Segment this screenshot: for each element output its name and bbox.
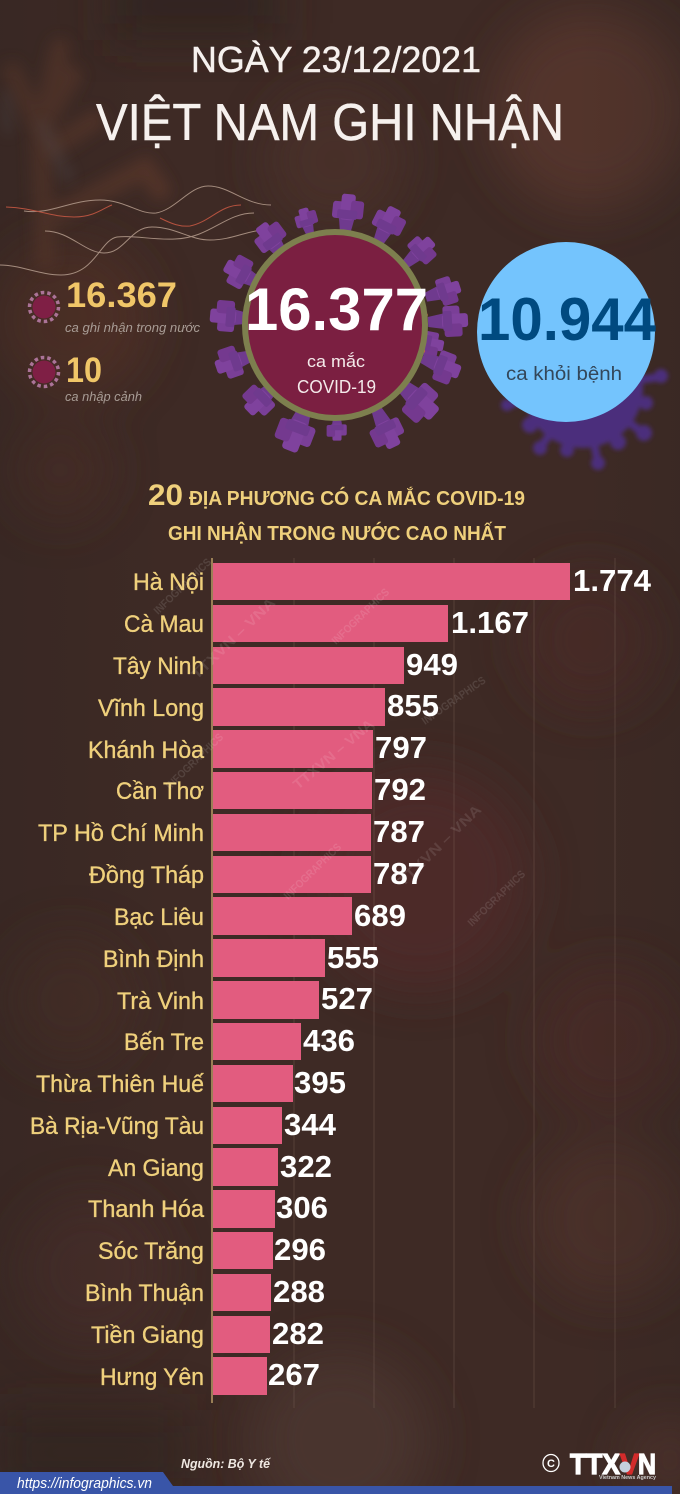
TTXVN logo: C (547, 1458, 555, 1470)
row: An Giang: 322 (280, 1149, 332, 1184)
row: Tiền Giang (91, 1316, 324, 1353)
row: Cần Thơ: 792 (374, 772, 426, 807)
row: Cà Mau (124, 605, 529, 642)
row: Trà Vinh: Trà Vinh (117, 988, 204, 1015)
watermarks: TTXVN – VNA (394, 801, 484, 889)
source: Nguồn: Bộ Y tế (181, 1456, 272, 1471)
row: Hà Nội: 1.774 (573, 563, 652, 598)
row: Bạc Liêu: Bạc Liêu (114, 904, 204, 931)
row: Bình Thuận: Bình Thuận (85, 1280, 204, 1307)
virus: recovered backdrop (501, 328, 668, 470)
row: Cần Thơ (116, 772, 426, 809)
row: Cần Thơ: Cần Thơ (116, 778, 204, 805)
recovered circle: 10.944 (478, 286, 657, 353)
watermarks: INFOGRAPHICS (164, 731, 226, 792)
row: Bến Tre (124, 1023, 355, 1060)
watermarks: TTXVN – VNA (188, 594, 278, 682)
virus: total cases (209, 193, 469, 457)
row: Hà Nội: Hà Nội (133, 569, 204, 596)
row: Khánh Hòa (88, 730, 427, 768)
title: VIỆT NAM GHI NHẬN (96, 94, 564, 152)
chart heading (148, 479, 525, 545)
virus: total cases: 16.377 (245, 276, 428, 343)
TTXVN logo: V (620, 1449, 640, 1481)
row: Vĩnh Long: 855 (387, 688, 439, 723)
row: Vĩnh Long: Vĩnh Long (98, 695, 204, 722)
row: Hà Nội (133, 563, 652, 600)
chart heading: GHI NHẬN TRONG NƯỚC CAO NHẤT (168, 521, 506, 545)
row: Khánh Hòa: Khánh Hòa (88, 737, 205, 764)
row: Hưng Yên: 267 (268, 1357, 320, 1392)
TTXVN logo: Vietnam News Agency (599, 1475, 656, 1481)
row: Tây Ninh (113, 647, 458, 684)
row: Tây Ninh: Tây Ninh (113, 653, 204, 680)
stat: imported cases: ca nhập cảnh (65, 389, 142, 404)
row: Bình Thuận (85, 1274, 325, 1311)
row: TP Hồ Chí Minh (38, 814, 425, 851)
row: Hưng Yên: Hưng Yên (100, 1364, 204, 1391)
stat: imported cases (30, 351, 142, 404)
title (96, 39, 564, 152)
row: Thừa Thiên Huế: Thừa Thiên Huế (36, 1071, 205, 1098)
row: Bạc Liêu: 689 (354, 898, 406, 933)
watermarks (152, 556, 528, 929)
row: Trà Vinh: 527 (321, 981, 373, 1016)
stat: domestic cases: ca ghi nhận trong nước (65, 320, 201, 335)
row: Thanh Hóa (88, 1190, 328, 1228)
watermarks: INFOGRAPHICS (152, 556, 214, 617)
watermarks: TTXVN – VNA (290, 716, 377, 792)
row: Bình Thuận: 288 (273, 1274, 325, 1309)
row: Bình Định (103, 939, 379, 977)
row: Tiền Giang: 282 (272, 1316, 324, 1351)
row: Sóc Trăng: 296 (274, 1232, 326, 1267)
stat: domestic cases (30, 276, 201, 335)
title: NGÀY 23/12/2021 (191, 39, 481, 80)
row: An Giang: An Giang (108, 1155, 204, 1182)
stat: imported cases: 10 (66, 351, 102, 390)
row: Đồng Tháp: Đồng Tháp (89, 862, 204, 889)
row: Bà Rịa-Vũng Tàu: Bà Rịa-Vũng Tàu (30, 1113, 204, 1140)
watermarks: INFOGRAPHICS (282, 841, 344, 902)
footer bar (0, 1472, 672, 1494)
row: Sóc Trăng: Sóc Trăng (98, 1238, 204, 1265)
row: Cà Mau: Cà Mau (124, 611, 204, 638)
recovered circle (477, 242, 657, 422)
virus: total cases: COVID-19 (297, 377, 376, 397)
row: Bà Rịa-Vũng Tàu (30, 1107, 337, 1144)
TTXVN logo: N (638, 1449, 656, 1481)
watermarks: INFOGRAPHICS (466, 868, 528, 929)
row: Sóc Trăng (98, 1232, 326, 1269)
row: Đồng Tháp (89, 856, 425, 893)
row: Bà Rịa-Vũng Tàu: 344 (284, 1107, 337, 1142)
row: Đồng Tháp: 787 (373, 856, 425, 891)
chart heading: ĐỊA PHƯƠNG CÓ CA MẮC COVID-19 (189, 486, 525, 510)
row: Bạc Liêu (114, 897, 406, 935)
row: Bình Định: 555 (327, 940, 379, 975)
row: Bình Định: Bình Định (103, 946, 204, 973)
row: Tiền Giang: Tiền Giang (91, 1322, 204, 1349)
stat: domestic cases: 16.367 (66, 276, 177, 315)
row: Thanh Hóa: 306 (276, 1190, 328, 1225)
row: Trà Vinh (117, 981, 373, 1019)
row: Vĩnh Long (98, 688, 439, 726)
row: Tây Ninh: 949 (406, 647, 458, 682)
wavy decorative lines (0, 186, 273, 275)
row: An Giang (108, 1148, 332, 1186)
row: Thừa Thiên Huế: 395 (294, 1065, 346, 1100)
row: Thanh Hóa: Thanh Hóa (88, 1196, 205, 1223)
bar chart (30, 558, 652, 1408)
TTXVN logo: TTX (570, 1449, 621, 1481)
chart heading: 20 (148, 479, 183, 512)
row: Cà Mau: 1.167 (451, 605, 529, 640)
virus: total cases: ca mắc (307, 352, 366, 371)
watermarks: INFOGRAPHICS (330, 586, 392, 647)
watermarks: INFOGRAPHICS (420, 675, 488, 727)
row: Thừa Thiên Huế (36, 1065, 346, 1102)
row: Khánh Hòa: 797 (375, 730, 427, 765)
TTXVN logo (543, 1449, 656, 1481)
recovered circle: ca khỏi bệnh (506, 364, 622, 385)
row: TP Hồ Chí Minh: 787 (373, 814, 425, 849)
row: TP Hồ Chí Minh: TP Hồ Chí Minh (38, 820, 204, 847)
row: Bến Tre: 436 (303, 1023, 355, 1058)
row: Bến Tre: Bến Tre (124, 1029, 204, 1056)
row: Hưng Yên (100, 1357, 320, 1395)
footer bar: https://infographics.vn (17, 1475, 152, 1492)
